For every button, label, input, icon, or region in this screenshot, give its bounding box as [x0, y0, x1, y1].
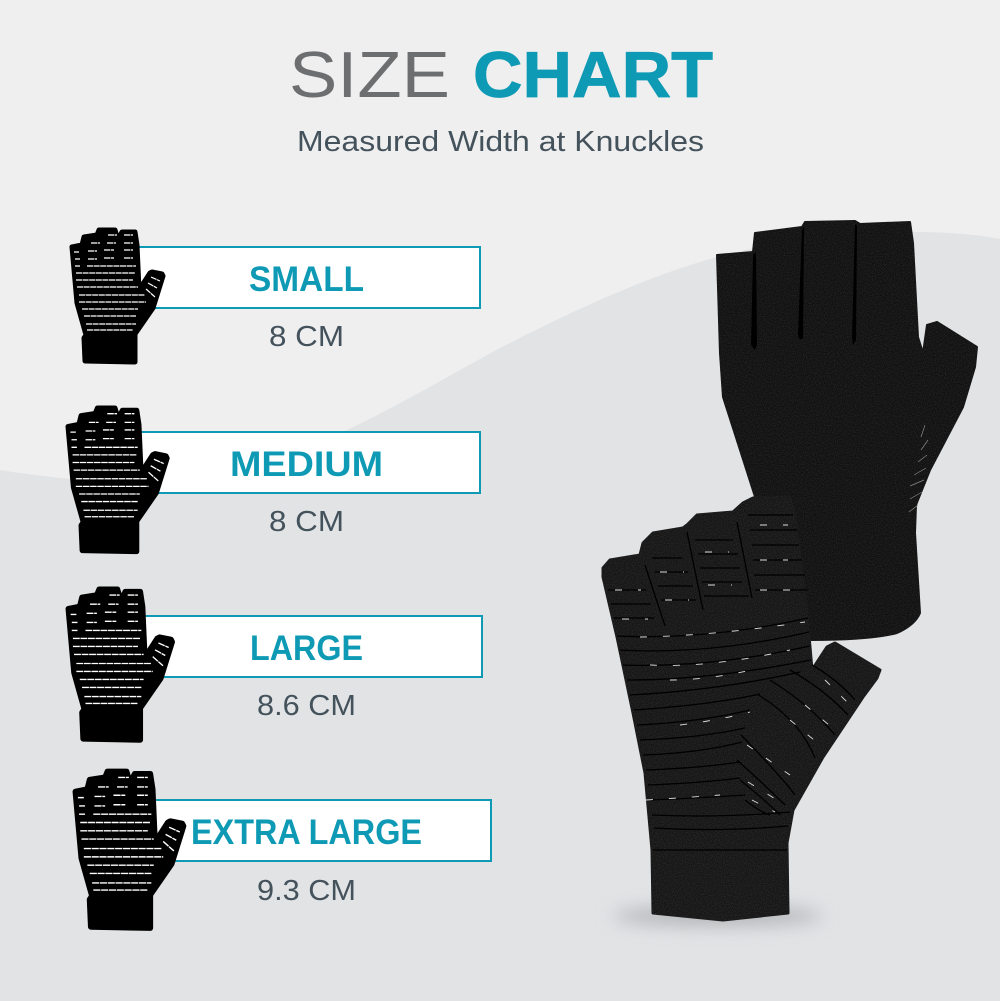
label: large: LARGE: [250, 629, 363, 668]
label box: medium: [130, 432, 480, 493]
size row: extra large: [76, 772, 491, 928]
value: extra large: 9.3 CM: [257, 875, 356, 907]
size row: medium: [68, 408, 480, 551]
title: SIZE: [289, 38, 450, 111]
label box: large: [130, 616, 482, 677]
icon: small glove: [72, 230, 163, 362]
icon: large glove: [68, 589, 172, 740]
finger slits: [751, 224, 857, 350]
label: extra large: EXTRA LARGE: [191, 813, 422, 852]
palm stripe highlights: [615, 525, 850, 812]
photo: back of glove: [717, 221, 977, 640]
photo: palm of glove: [603, 497, 880, 920]
title: CHART: [473, 38, 713, 111]
label: medium: MEDIUM: [230, 445, 383, 484]
size row: small: [72, 230, 480, 362]
shadow under glove: [613, 907, 823, 925]
label box: extra large: [130, 800, 491, 861]
value: small: 8 CM: [269, 321, 344, 353]
label box: small: [130, 247, 480, 308]
icon: medium glove: [68, 408, 167, 551]
background wave: [0, 232, 1000, 1001]
title: [289, 38, 713, 111]
value: medium: 8 CM: [269, 506, 344, 538]
subtitle: Measured Width at Knuckles: [297, 126, 704, 158]
label: small: SMALL: [249, 260, 364, 299]
palm stripes: [608, 515, 855, 850]
size row: large: [68, 589, 482, 740]
icon: extra large glove: [76, 772, 183, 928]
value: large: 8.6 CM: [257, 690, 356, 722]
